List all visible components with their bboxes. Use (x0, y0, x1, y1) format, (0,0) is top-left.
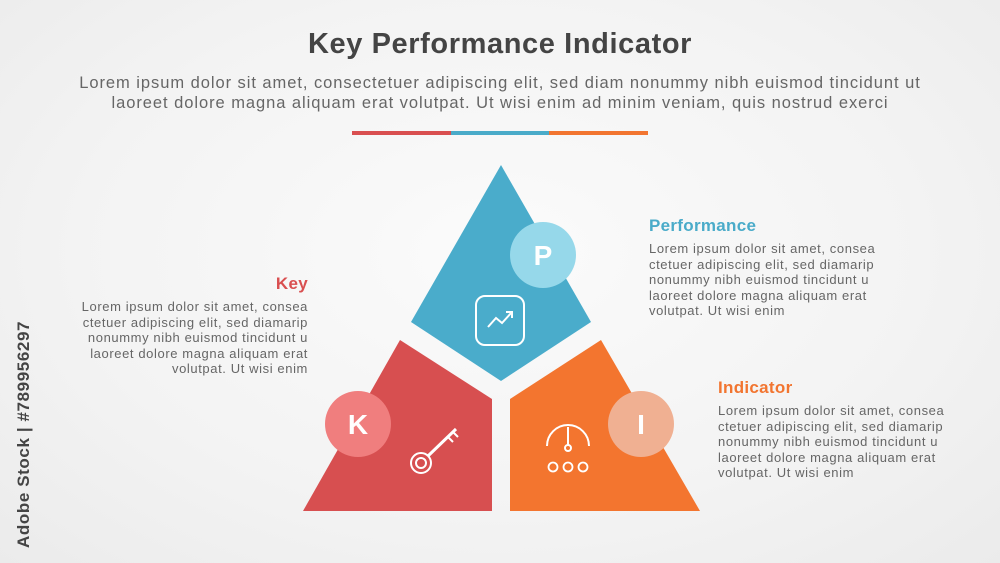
text block: Performance: volutpat. Ut wisi enim (649, 303, 785, 318)
text block: Key: nonummy nibh euismod tincidunt u (88, 330, 308, 345)
text block: Indicator: ctetuer adipiscing elit, sed diamarip (718, 419, 943, 434)
text block: Indicator: Lorem ipsum dolor sit amet, consea (718, 403, 944, 418)
text block: Indicator: volutpat. Ut wisi enim (718, 465, 854, 480)
text block: Key: Lorem ipsum dolor sit amet, consea (82, 299, 308, 314)
text block: Key: volutpat. Ut wisi enim (172, 361, 308, 376)
segment: indicator: I (637, 409, 645, 440)
text block: Performance: laoreet dolore magna aliquam erat (649, 288, 867, 303)
text block: Indicator (718, 378, 944, 480)
title: Key Performance Indicator (308, 28, 692, 60)
segment: key: K (348, 409, 368, 440)
text block: Performance: Performance (649, 216, 756, 235)
subtitle (79, 74, 921, 112)
text block: Performance: ctetuer adipiscing elit, sed diamarip (649, 257, 874, 272)
text block: Indicator: nonummy nibh euismod tincidunt u (718, 434, 938, 449)
segment: indicator (510, 340, 700, 511)
color divider (352, 131, 648, 135)
text block: Performance: Lorem ipsum dolor sit amet, consea (649, 241, 875, 256)
watermark side text: Adobe Stock | #789956297 (14, 321, 33, 548)
text block: Key: Key (276, 274, 308, 293)
text block: Performance (649, 216, 875, 318)
text block: Key: ctetuer adipiscing elit, sed diamarip (83, 315, 308, 330)
segment: performance: P (534, 240, 552, 271)
text block: Indicator: Indicator (718, 378, 792, 397)
text block: Key (82, 274, 308, 376)
text block: Performance: nonummy nibh euismod tincidunt u (649, 272, 869, 287)
subtitle: Lorem ipsum dolor sit amet, consectetuer adipiscing elit, sed diam nonummy nibh euismod tincidunt ut (79, 74, 921, 92)
subtitle: laoreet dolore magna aliquam erat volutpat. Ut wisi enim ad minim veniam, quis nostrud exerci (111, 94, 889, 112)
segment: performance (411, 165, 591, 381)
text block: Indicator: laoreet dolore magna aliquam erat (718, 450, 936, 465)
segment: key (303, 340, 492, 511)
text block: Key: laoreet dolore magna aliquam erat (90, 346, 308, 361)
